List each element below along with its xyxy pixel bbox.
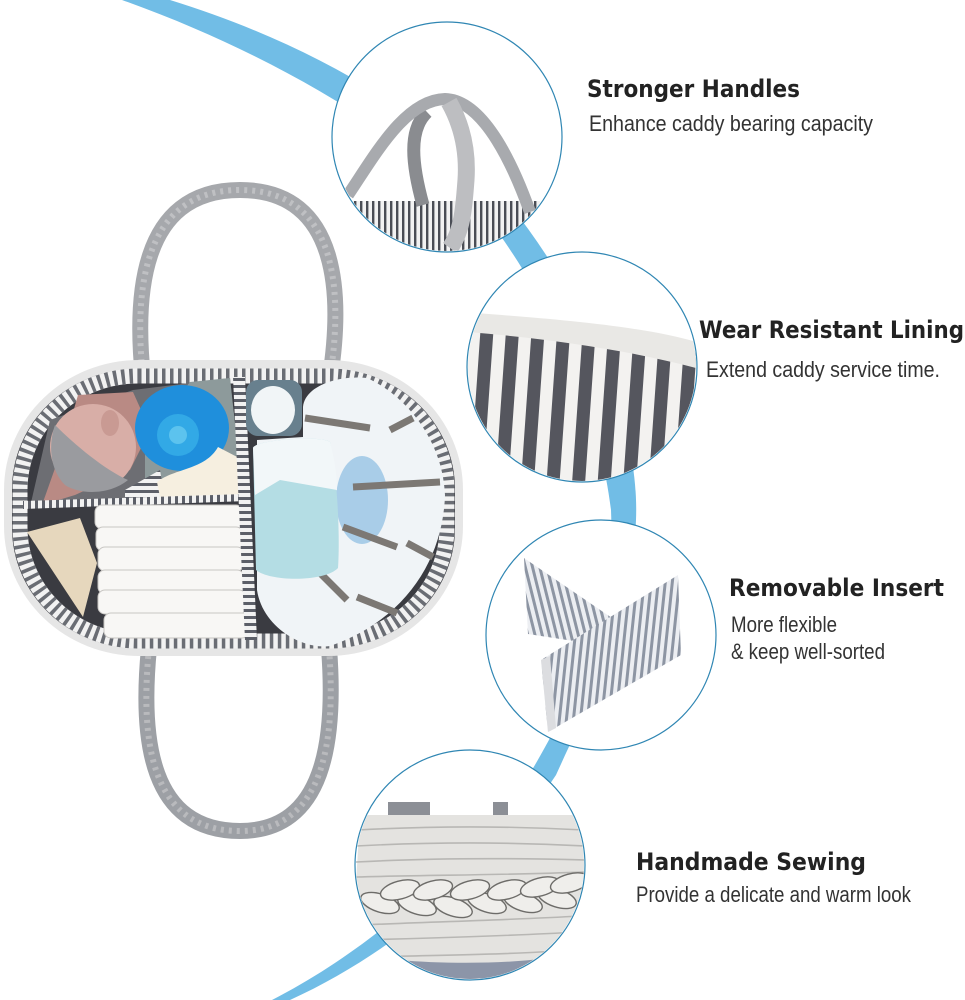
basket interior (12, 369, 455, 648)
diapers stack (95, 505, 249, 638)
text: stronger handles: Enhance caddy bearing capacity (589, 111, 873, 136)
lining stripes (20, 376, 447, 641)
bottom handle (146, 648, 331, 831)
folded towel (157, 447, 243, 499)
callout circle: sewing (350, 750, 592, 985)
compartment: cups (30, 378, 243, 507)
pink cup (42, 392, 150, 505)
small bottle (246, 380, 302, 436)
callout circle: insert (486, 520, 716, 750)
blanket gray bands (305, 418, 440, 613)
bottle behind (145, 378, 240, 485)
blanket shadow (336, 456, 388, 544)
callout circle: handles (332, 22, 562, 261)
text: removable insert line 2: & keep well-sorted (731, 639, 885, 664)
top handle (140, 190, 335, 378)
text: handmade sewing: Provide a delicate and warm look (636, 882, 912, 907)
rolled blanket (257, 377, 445, 646)
text: removable insert line 1: More flexible (731, 612, 837, 637)
beige package (27, 518, 97, 617)
baby wipes box (253, 439, 339, 579)
heading: removable insert: Removable Insert (729, 574, 944, 602)
heading: handmade sewing: Handmade Sewing (636, 848, 866, 876)
striped lining (20, 376, 447, 641)
blue cup (135, 385, 229, 471)
horizontal divider (23, 494, 247, 509)
blue arc (122, 0, 636, 1000)
basket rim (4, 360, 463, 656)
vertical divider (233, 377, 257, 640)
heading: stronger handles: Stronger Handles (587, 75, 800, 103)
basket product photo (4, 190, 463, 831)
callout circle: lining (465, 252, 700, 490)
text: wear resistant lining: Extend caddy service time. (706, 357, 940, 382)
stripes behind cup (125, 470, 165, 504)
